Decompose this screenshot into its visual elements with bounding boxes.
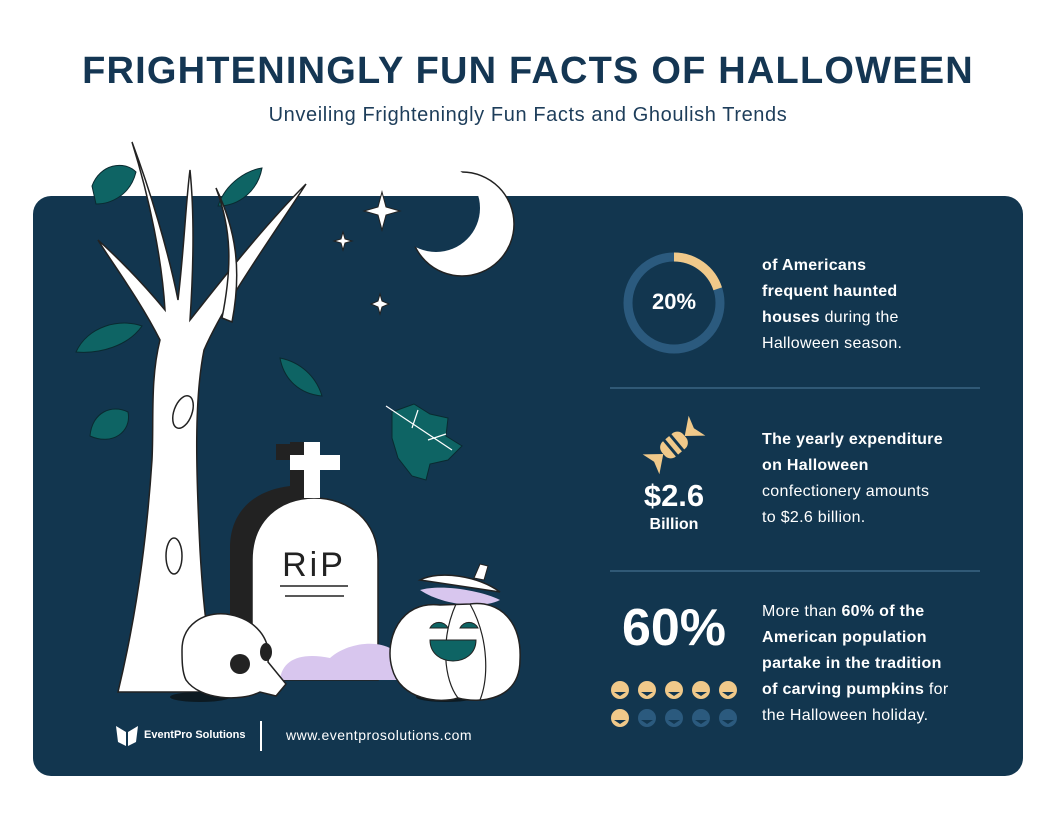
icon: candy	[643, 416, 705, 474]
icon: pumpkin pictogram	[611, 681, 737, 727]
icon: stars	[334, 192, 400, 314]
footer: logo	[116, 726, 246, 746]
text: pumpkins: the Halloween holiday.	[762, 707, 928, 724]
text: pumpkins: of carving pumpkins for	[762, 681, 948, 698]
text: haunted houses	[762, 257, 902, 352]
stat: 60%: 60%	[622, 599, 726, 657]
text: haunted houses: Halloween season.	[762, 335, 902, 352]
text: pumpkins: partake in the tradition	[762, 655, 942, 672]
dividers	[610, 387, 980, 389]
text: confectionery	[762, 431, 943, 526]
icon: leaves	[76, 165, 462, 480]
stat: $2.6 billion	[644, 478, 704, 533]
icon: skull	[170, 614, 286, 702]
text: confectionery: The yearly expenditure	[762, 431, 943, 448]
icon: pumpkin	[390, 564, 520, 702]
text: haunted houses: of Americans	[762, 257, 866, 274]
text: haunted houses: frequent haunted	[762, 283, 897, 300]
text: pumpkins: More than 60% of the	[762, 603, 924, 620]
text: confectionery: to $2.6 billion.	[762, 509, 866, 526]
subtitle: Unveiling Frighteningly Fun Facts and Ghoulish Trends	[269, 104, 787, 126]
text: pumpkins: American population	[762, 629, 927, 646]
stat: $2.6 billion: $2.6	[644, 478, 704, 513]
footer: logo: EventPro Solutions	[144, 729, 245, 741]
text: confectionery: on Halloween	[762, 457, 869, 474]
icon: tombstone: RiP	[282, 546, 346, 584]
text: haunted houses: houses during the	[762, 309, 899, 326]
icon: moon	[410, 172, 514, 276]
title: FRIGHTENINGLY FUN FACTS OF HALLOWEEN	[82, 50, 974, 92]
text: confectionery: confectionery amounts	[762, 483, 929, 500]
chart: 20% ring	[628, 257, 720, 349]
stat: $2.6 billion: Billion	[650, 516, 698, 533]
panel: main dark background	[33, 196, 1023, 776]
footer: url: www.eventprosolutions.com	[286, 727, 472, 743]
icon: tree	[98, 142, 306, 692]
icon: tombstone	[230, 442, 400, 680]
illustration: halloween scene	[75, 142, 980, 727]
stat: 20%: 20%	[652, 289, 696, 314]
text: pumpkins	[762, 603, 948, 724]
